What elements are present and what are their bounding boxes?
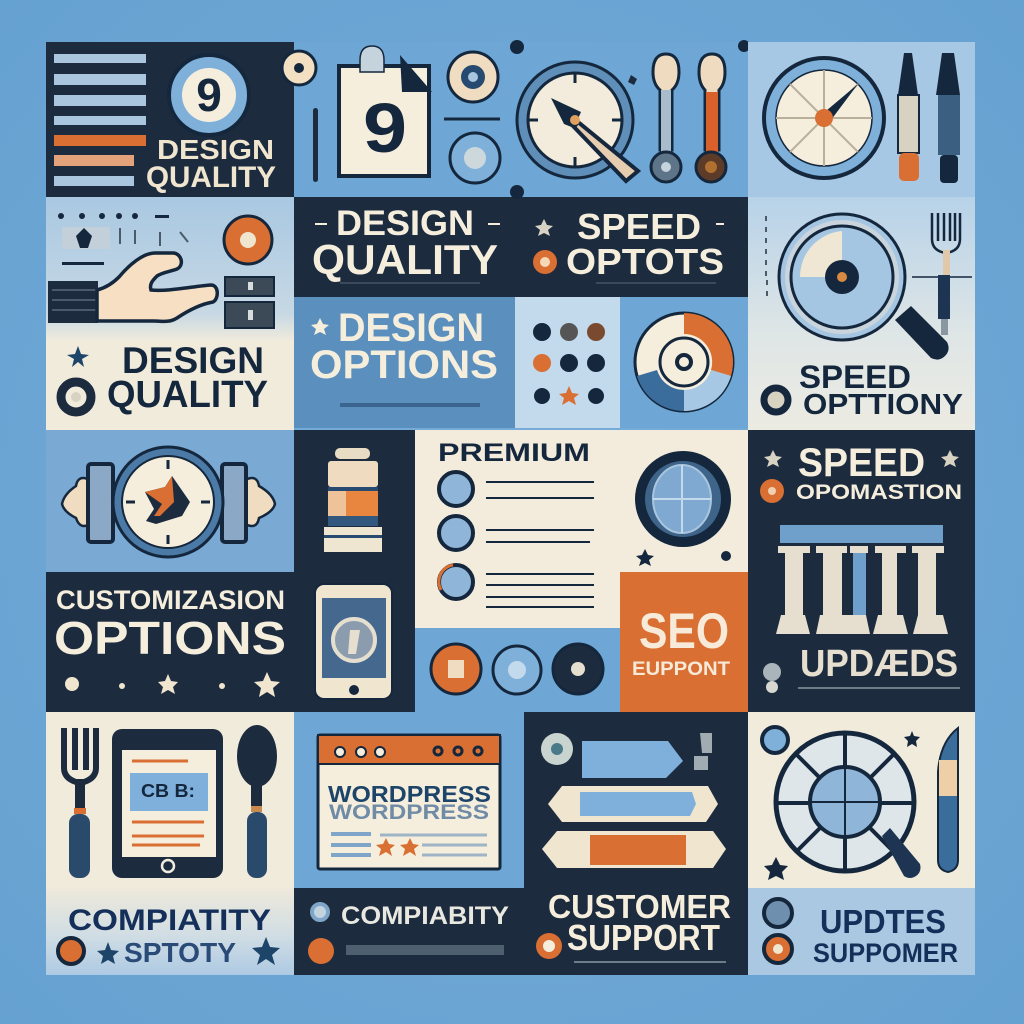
panel: wordpress browser: WORDPRESS xyxy=(328,781,491,807)
panel: wordpress browser xyxy=(294,712,524,888)
panel: jar and phone xyxy=(294,430,415,712)
panel: wordpress browser: WORDPRESS xyxy=(329,801,489,824)
panel: compass and markers xyxy=(748,42,975,197)
panel: compatibility dark: COMPIABITY xyxy=(341,902,509,930)
panel: round buttons xyxy=(415,628,620,712)
panel: speed optimization columns updates: SPEED xyxy=(798,441,925,485)
panel: magnifier speed: OPTTIONY xyxy=(803,389,963,421)
panel: magnifier speed: SPEED xyxy=(799,359,911,395)
panel: customer support ribbons xyxy=(524,712,748,975)
panel: updates support: SUPPOMER xyxy=(813,938,958,968)
panel: customization options: OPTIONS xyxy=(54,612,286,664)
panel: customer support ribbons: CUSTOMER xyxy=(548,888,731,925)
panel: speed optimization columns updates: UPDÆDS xyxy=(800,643,958,685)
panel: compatibility left xyxy=(46,888,294,975)
panel: calendar icons: 9 xyxy=(363,89,407,167)
panel: design options: DESIGN xyxy=(338,306,484,350)
panel: compatibility left: SPTOTY xyxy=(124,937,236,968)
panel: dial xyxy=(620,430,748,572)
panel: speed optimization columns updates: OPOMASTION xyxy=(796,481,962,504)
panel: magnifier wheel xyxy=(748,712,975,888)
panel: updates support xyxy=(748,888,975,975)
panel: magnifier speed xyxy=(748,197,975,430)
panel: hand design quality: QUALITY xyxy=(107,374,268,416)
panel: design quality 9 badge: DESIGN xyxy=(157,134,274,165)
panel: compatibility dark xyxy=(294,888,524,975)
panel: premium list: PREMIUM xyxy=(438,439,590,467)
panel: clock xyxy=(46,430,294,572)
panel: speed options heading: OPTOTS xyxy=(566,241,724,282)
panel: design quality 9 badge: QUALITY xyxy=(146,161,276,194)
panel: calendar icons xyxy=(282,42,515,197)
panel: speed options heading xyxy=(510,185,748,297)
panel: seo support xyxy=(620,572,748,712)
panel: design quality 9 badge xyxy=(46,42,318,197)
panel: hand design quality xyxy=(46,197,294,430)
panel: hand design quality: DESIGN xyxy=(122,340,264,381)
panel: design options: OPTIONS xyxy=(310,343,498,387)
panel: donut chart xyxy=(620,297,748,428)
panel: customer support ribbons: SUPPORT xyxy=(567,917,720,958)
panel: seo support: EUPPONT xyxy=(632,659,730,680)
panel: icon grid xyxy=(515,297,620,428)
panel: customization options xyxy=(46,572,294,712)
panel: premium list xyxy=(415,430,620,628)
panel: gauge and tools xyxy=(510,40,750,197)
panel: customization options: CUSTOMIZASION xyxy=(56,585,285,615)
panel: design options xyxy=(294,297,515,428)
panel: seo support: SEO xyxy=(639,603,729,659)
panel: compatibility left: COMPIATITY xyxy=(68,904,271,937)
panel: design quality heading: DESIGN xyxy=(336,204,474,243)
panel: design quality heading: QUALITY xyxy=(312,236,498,283)
panel: design quality heading xyxy=(294,197,515,297)
panel: tablet and cutlery xyxy=(46,712,294,888)
panel: design quality 9 badge: 9 xyxy=(196,69,222,121)
panel: updates support: UPDTES xyxy=(820,903,946,940)
panel: speed options heading: SPEED xyxy=(577,206,701,247)
panel: tablet and cutlery: CB B: xyxy=(141,781,195,801)
panel: speed optimization columns updates xyxy=(748,430,975,712)
